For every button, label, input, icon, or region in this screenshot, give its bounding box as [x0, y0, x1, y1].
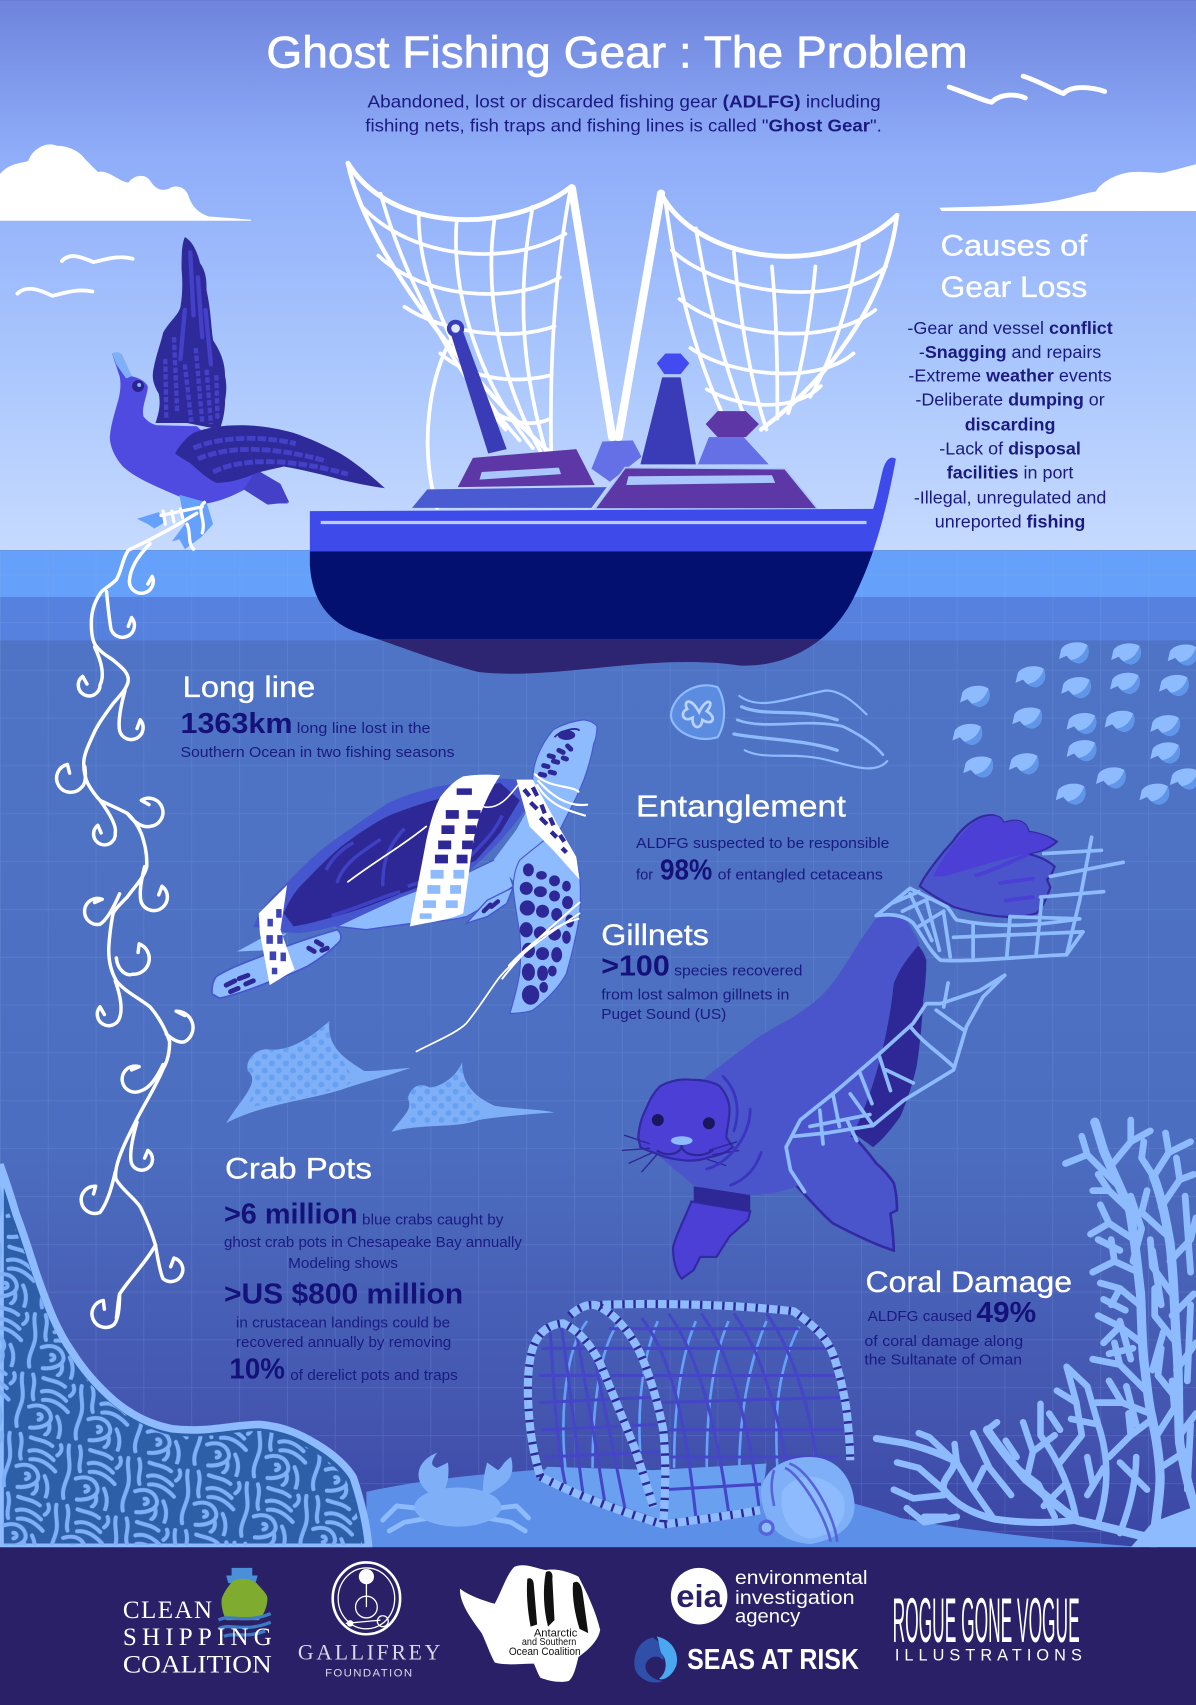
causes list: -Extreme weather events [908, 366, 1112, 386]
beak and eye [112, 352, 144, 392]
causes list [907, 318, 1113, 531]
eia wordmark: agency [735, 1605, 800, 1627]
coral description: of coral damage along [864, 1334, 1023, 1350]
entanglement stat: 98% [660, 854, 712, 886]
bird feet [137, 495, 213, 549]
causes list: facilities in port [947, 462, 1073, 482]
buoy highlight [781, 1477, 845, 1539]
gillnets description: Puget Sound (US) [601, 1007, 726, 1023]
trap floor [540, 1464, 767, 1520]
trap frame stripes [528, 1304, 850, 1524]
trap inner dark bars [539, 1314, 844, 1517]
logo: Rogue Gone Vogue Illustrations [893, 1586, 1082, 1664]
crab description two: recovered annually by removing [236, 1335, 451, 1351]
coral description: the Sultanate of Oman [864, 1353, 1022, 1369]
tail feathers [244, 470, 289, 505]
coral damage heading: Coral Damage [865, 1266, 1072, 1299]
causes list: -Deliberate dumping or [915, 390, 1105, 410]
net poles [572, 188, 661, 437]
logo: Antarctic and Southern Ocean Coalition [460, 1565, 600, 1682]
coral stat: 49% [976, 1296, 1036, 1328]
loose fishing line [348, 783, 580, 1051]
coral description [864, 1334, 1023, 1369]
crab body [414, 1487, 501, 1527]
small flipper [466, 887, 513, 923]
causes list: -Illegal, unregulated and [914, 487, 1106, 507]
logo: Environmental Investigation Agency [671, 1567, 868, 1627]
gillnets heading: Gillnets [601, 919, 709, 952]
eia badge [671, 1568, 727, 1624]
logo: Seas At Risk [634, 1636, 859, 1683]
crab [383, 1453, 528, 1531]
shell scutes [326, 810, 502, 916]
coalition text [509, 1627, 581, 1658]
right wing [175, 425, 385, 488]
buoy [760, 1457, 855, 1544]
rear funnel [698, 411, 769, 464]
gillnets description: from lost salmon gillnets in [601, 987, 789, 1003]
upper wing [153, 237, 226, 430]
crab stat three: 10% [229, 1353, 285, 1385]
long line description [180, 721, 454, 761]
branching coral: lower fan [876, 1367, 1153, 1539]
coral damage text [864, 1266, 1072, 1369]
Foundation wordmark: FOUNDATION [325, 1668, 412, 1680]
background: deep sea [0, 640, 1196, 1547]
front flipper [510, 832, 580, 1013]
intro text: fishing nets, fish traps and fishing lines is called " Ghost Gear". [365, 116, 882, 136]
seal dark inner strip [854, 941, 926, 1147]
Antarctica map [460, 1565, 600, 1682]
net band: middle [410, 775, 500, 926]
crab description one: blue crabs caught by [362, 1212, 504, 1228]
cloud: right [939, 164, 1196, 211]
coral stat [868, 1296, 1036, 1328]
mast rope [428, 337, 452, 508]
background: mid sea band [0, 597, 1196, 640]
fishing boat [310, 320, 896, 674]
coral base [1131, 1506, 1196, 1547]
eia wordmark [735, 1567, 868, 1627]
rear flipper back [237, 933, 287, 951]
eia badge: eia [676, 1578, 722, 1614]
monk seal [622, 815, 1123, 1279]
rear flipper [212, 930, 341, 998]
crab description one [224, 1212, 523, 1272]
net: right [661, 194, 897, 430]
fishing nets above boat [348, 163, 897, 508]
left cabin [458, 449, 595, 487]
background: sea surface band [0, 550, 1196, 597]
birds: top right [949, 76, 1105, 102]
gillnets text [601, 919, 802, 1023]
net on seal tail [876, 837, 1123, 961]
net band: neck [516, 774, 587, 880]
gillnets figure: >100 [601, 949, 670, 981]
fish shoal [952, 642, 1196, 805]
crab description one: ghost crab pots in Chesapeake Bay annually [224, 1235, 523, 1251]
crab legs [383, 1506, 528, 1531]
crab stat two: >US $800 million [224, 1278, 463, 1310]
hooks [57, 544, 193, 1327]
entanglement text [636, 790, 889, 886]
trap inner light bars [563, 1321, 799, 1468]
chimney [640, 353, 696, 464]
gillnets description [601, 963, 802, 1023]
buoy ring [760, 1521, 773, 1534]
footer band [0, 1547, 1196, 1705]
buoy band [772, 1464, 837, 1542]
title: Ghost Fishing Gear : The Problem [266, 28, 968, 77]
crab stat one: >6 million [224, 1197, 358, 1229]
long line description: long line lost in the [297, 721, 431, 737]
buoy ball [761, 1457, 855, 1544]
lower deck [412, 487, 607, 508]
brain coral body [0, 1165, 369, 1547]
swirl icon [634, 1636, 677, 1683]
seal fold lines [707, 1076, 761, 1185]
Clean Shipping Coalition wordmark: CLEAN [123, 1597, 212, 1624]
Gallifrey emblem [333, 1562, 400, 1634]
head [533, 720, 597, 830]
manta rays [226, 1021, 555, 1132]
long line heading: Long line [183, 671, 315, 704]
jellyfish [671, 685, 887, 768]
coral stat: ALDFG caused [868, 1309, 972, 1325]
sea turtle [212, 720, 597, 1051]
seal collar [694, 1186, 750, 1211]
background: sky [0, 0, 1196, 550]
bird body [110, 353, 288, 503]
net band: rear [259, 885, 295, 985]
seal front flipper [673, 1202, 750, 1279]
crab description one: Modeling shows [288, 1256, 398, 1272]
seal tail flipper [920, 815, 1057, 917]
intro text [365, 92, 882, 136]
entanglement stat [636, 854, 883, 886]
causes heading: Causes of [940, 230, 1088, 263]
Illustrations wordmark: ILLUSTRATIONS [895, 1646, 1082, 1664]
hull: navy [310, 551, 873, 640]
jellyfish bell [671, 685, 724, 739]
brain coral [0, 1165, 369, 1547]
logo: Clean Shipping Coalition [123, 1568, 272, 1678]
ray: left [226, 1021, 411, 1123]
causes heading: Gear Loss [940, 271, 1087, 304]
seal head [622, 1079, 739, 1172]
net: left [348, 163, 571, 459]
crab description two [236, 1316, 451, 1351]
right cabin [595, 468, 818, 509]
cloud: left [0, 144, 251, 221]
hull: purple keel [378, 639, 820, 674]
branching coral: right [1066, 1120, 1196, 1544]
mast [447, 320, 507, 453]
coalition text: Ocean Coalition [509, 1646, 581, 1658]
causes list: discarding [965, 415, 1055, 435]
crab description three: of derelict pots and traps [290, 1368, 458, 1384]
Clean Shipping Coalition wordmark [123, 1597, 272, 1678]
seal body [641, 913, 920, 1195]
gillnets description: species recovered [674, 963, 802, 979]
Gallifrey wordmark: GALLIFREY [298, 1640, 441, 1664]
causes list: -Snagging and repairs [919, 342, 1101, 362]
causes list: -Lack of disposal [939, 439, 1081, 459]
eia wordmark: environmental [735, 1567, 868, 1589]
shell dark [284, 783, 520, 926]
jellyfish tentacles [734, 690, 887, 768]
trap frame [528, 1304, 850, 1524]
long line description: Southern Ocean in two fishing seasons [180, 745, 454, 761]
long line main strand [84, 513, 197, 1318]
entanglement line: ALDFG suspected to be responsible [636, 836, 889, 852]
net on seal body [786, 975, 1005, 1192]
long line figure: 1363km [180, 707, 292, 739]
coalition text: and Southern [522, 1637, 576, 1648]
neck [494, 800, 580, 881]
crab pots text [224, 1153, 523, 1385]
seal rear flipper [794, 1134, 897, 1250]
logo: Gallifrey Foundation [298, 1562, 441, 1680]
hull stripe [321, 521, 867, 524]
Seas At Risk wordmark: SEAS AT RISK [687, 1643, 859, 1675]
background: water grid [0, 550, 1196, 1547]
Clean Shipping Coalition wordmark: SHIPPING [123, 1624, 272, 1651]
hull: blue [310, 458, 896, 552]
Clean Shipping Coalition wordmark: COALITION [123, 1651, 272, 1678]
entanglement stat: of entangled cetaceans [718, 868, 883, 884]
small light funnel [591, 440, 641, 482]
sea floor [366, 1469, 1144, 1547]
brain coral maze pattern [0, 1185, 362, 1545]
shell outer [253, 779, 533, 933]
crab claws [419, 1453, 512, 1498]
crab description two: in crustacean landings could be [236, 1316, 450, 1332]
intro text: Abandoned, lost or discarded fishing gear (ADLFG) including [367, 92, 881, 112]
crab trap [528, 1304, 850, 1524]
long line with hooks [57, 513, 197, 1327]
coalition text: Antarctic [534, 1627, 578, 1639]
crab pots heading: Crab Pots [225, 1153, 372, 1186]
eia wordmark: investigation [735, 1587, 855, 1609]
long line text [180, 671, 454, 761]
entanglement heading: Entanglement [636, 790, 847, 824]
causes heading [940, 230, 1088, 304]
entanglement stat: for [636, 868, 653, 884]
causes list: unreported fishing [935, 511, 1085, 531]
causes of gear loss [907, 230, 1113, 531]
penguins [527, 1571, 588, 1633]
birds: left [17, 256, 133, 296]
ship icon [219, 1568, 271, 1636]
albatross bird [110, 237, 385, 549]
ray: right [391, 1062, 555, 1132]
plastron [337, 860, 513, 930]
causes list: -Gear and vessel conflict [907, 318, 1113, 338]
